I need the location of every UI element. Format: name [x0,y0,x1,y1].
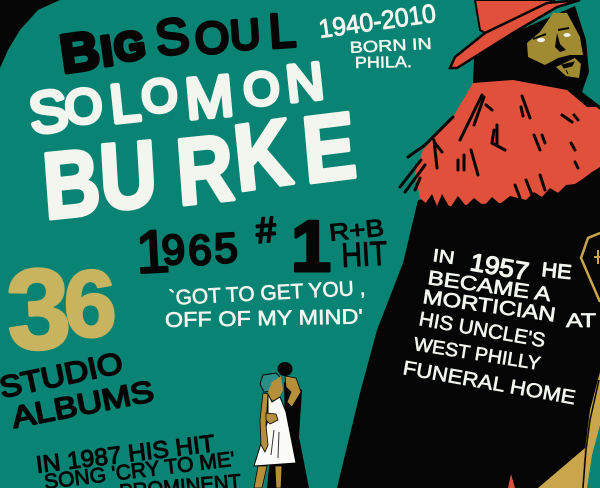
quote: `GOT TO GET YOU , [168,277,366,310]
1965 number one hit: R+B [328,214,385,247]
title: Big Soul: I [98,27,116,75]
funeral home text: FUNERAL HOME [401,357,577,409]
title: Solomon: O [241,61,282,116]
title: Solomon: O [139,68,180,123]
1965 number one hit: 9 [160,225,187,274]
title: Big Soul: G [111,23,148,71]
quote: OFF OF MY MIND' [165,306,363,332]
woman's legs [254,466,282,488]
man's arm [285,376,301,407]
title: Big Soul [56,4,297,85]
dates: PHILA. [355,54,412,72]
funeral home text: WEST PHILLY [412,334,542,375]
mouth [562,62,574,74]
man's hand on waist [266,413,278,424]
title: Solomon: L [107,72,143,135]
hat brim [450,0,580,68]
title: Big Soul: U [228,10,262,59]
funeral home text [401,245,597,409]
hair [473,6,600,110]
icon: coffin [581,233,600,302]
studio albums: STUDIO [0,347,126,405]
woman's hair [260,373,281,392]
funeral home text: MORTICIAN [421,286,557,327]
1987 note: IN 1987 HIS HIT [34,430,217,479]
cape fringe [425,167,600,212]
title: Solomon: S [25,77,72,147]
studio albums [0,347,157,435]
figure: man in red hat and cape [337,0,600,488]
cape marks [400,95,600,198]
chin [556,58,581,78]
36: 6 [62,250,118,357]
man's body [267,382,309,488]
1965 number one hit: 1 [134,217,171,286]
dates [317,0,438,72]
title: Big Soul: S [152,7,193,67]
title: Burke: BURKE [39,92,360,239]
1965 number one hit: 1 [291,207,331,287]
black corner [0,0,60,68]
1965 number one hit: HIT [340,235,388,275]
funeral home text: HE [540,259,573,284]
funeral home text: HIS UNCLE'S [417,308,547,352]
bottom right robe detail [508,372,600,488]
woman's arm [260,393,268,452]
black cloak body [337,180,600,488]
quote [165,277,366,332]
title: Big Soul: L [267,4,297,59]
icon: coffin cross [594,250,600,264]
dress folds [271,430,279,458]
title: Solomon: M [182,63,236,132]
hat crown [475,0,555,33]
funeral home text: AT [566,311,597,332]
title: Big Soul: O [193,13,231,64]
face [527,13,583,65]
1965 number one hit: 6 [187,226,213,274]
nose [555,33,566,52]
woman's face and neck [268,376,283,402]
man's head [278,362,292,376]
dress [254,394,296,466]
title: Solomon: N [283,52,327,114]
1965 number one hit: # [254,208,278,251]
cape [415,80,600,207]
1965 number one hit: 5 [213,224,239,272]
funeral home text: 1957 [468,248,531,286]
couple embracing [254,362,309,488]
36: 3 [4,245,74,375]
dates: BORN IN [349,36,432,57]
eyes and brows [533,28,569,39]
funeral home text: BECAME A [426,267,553,306]
title: Solomon: O [63,79,104,135]
1965 number one hit [134,207,388,287]
title: Big Soul: B [56,20,103,85]
studio albums: ALBUMS [9,375,157,435]
funeral home text: IN [431,245,456,268]
